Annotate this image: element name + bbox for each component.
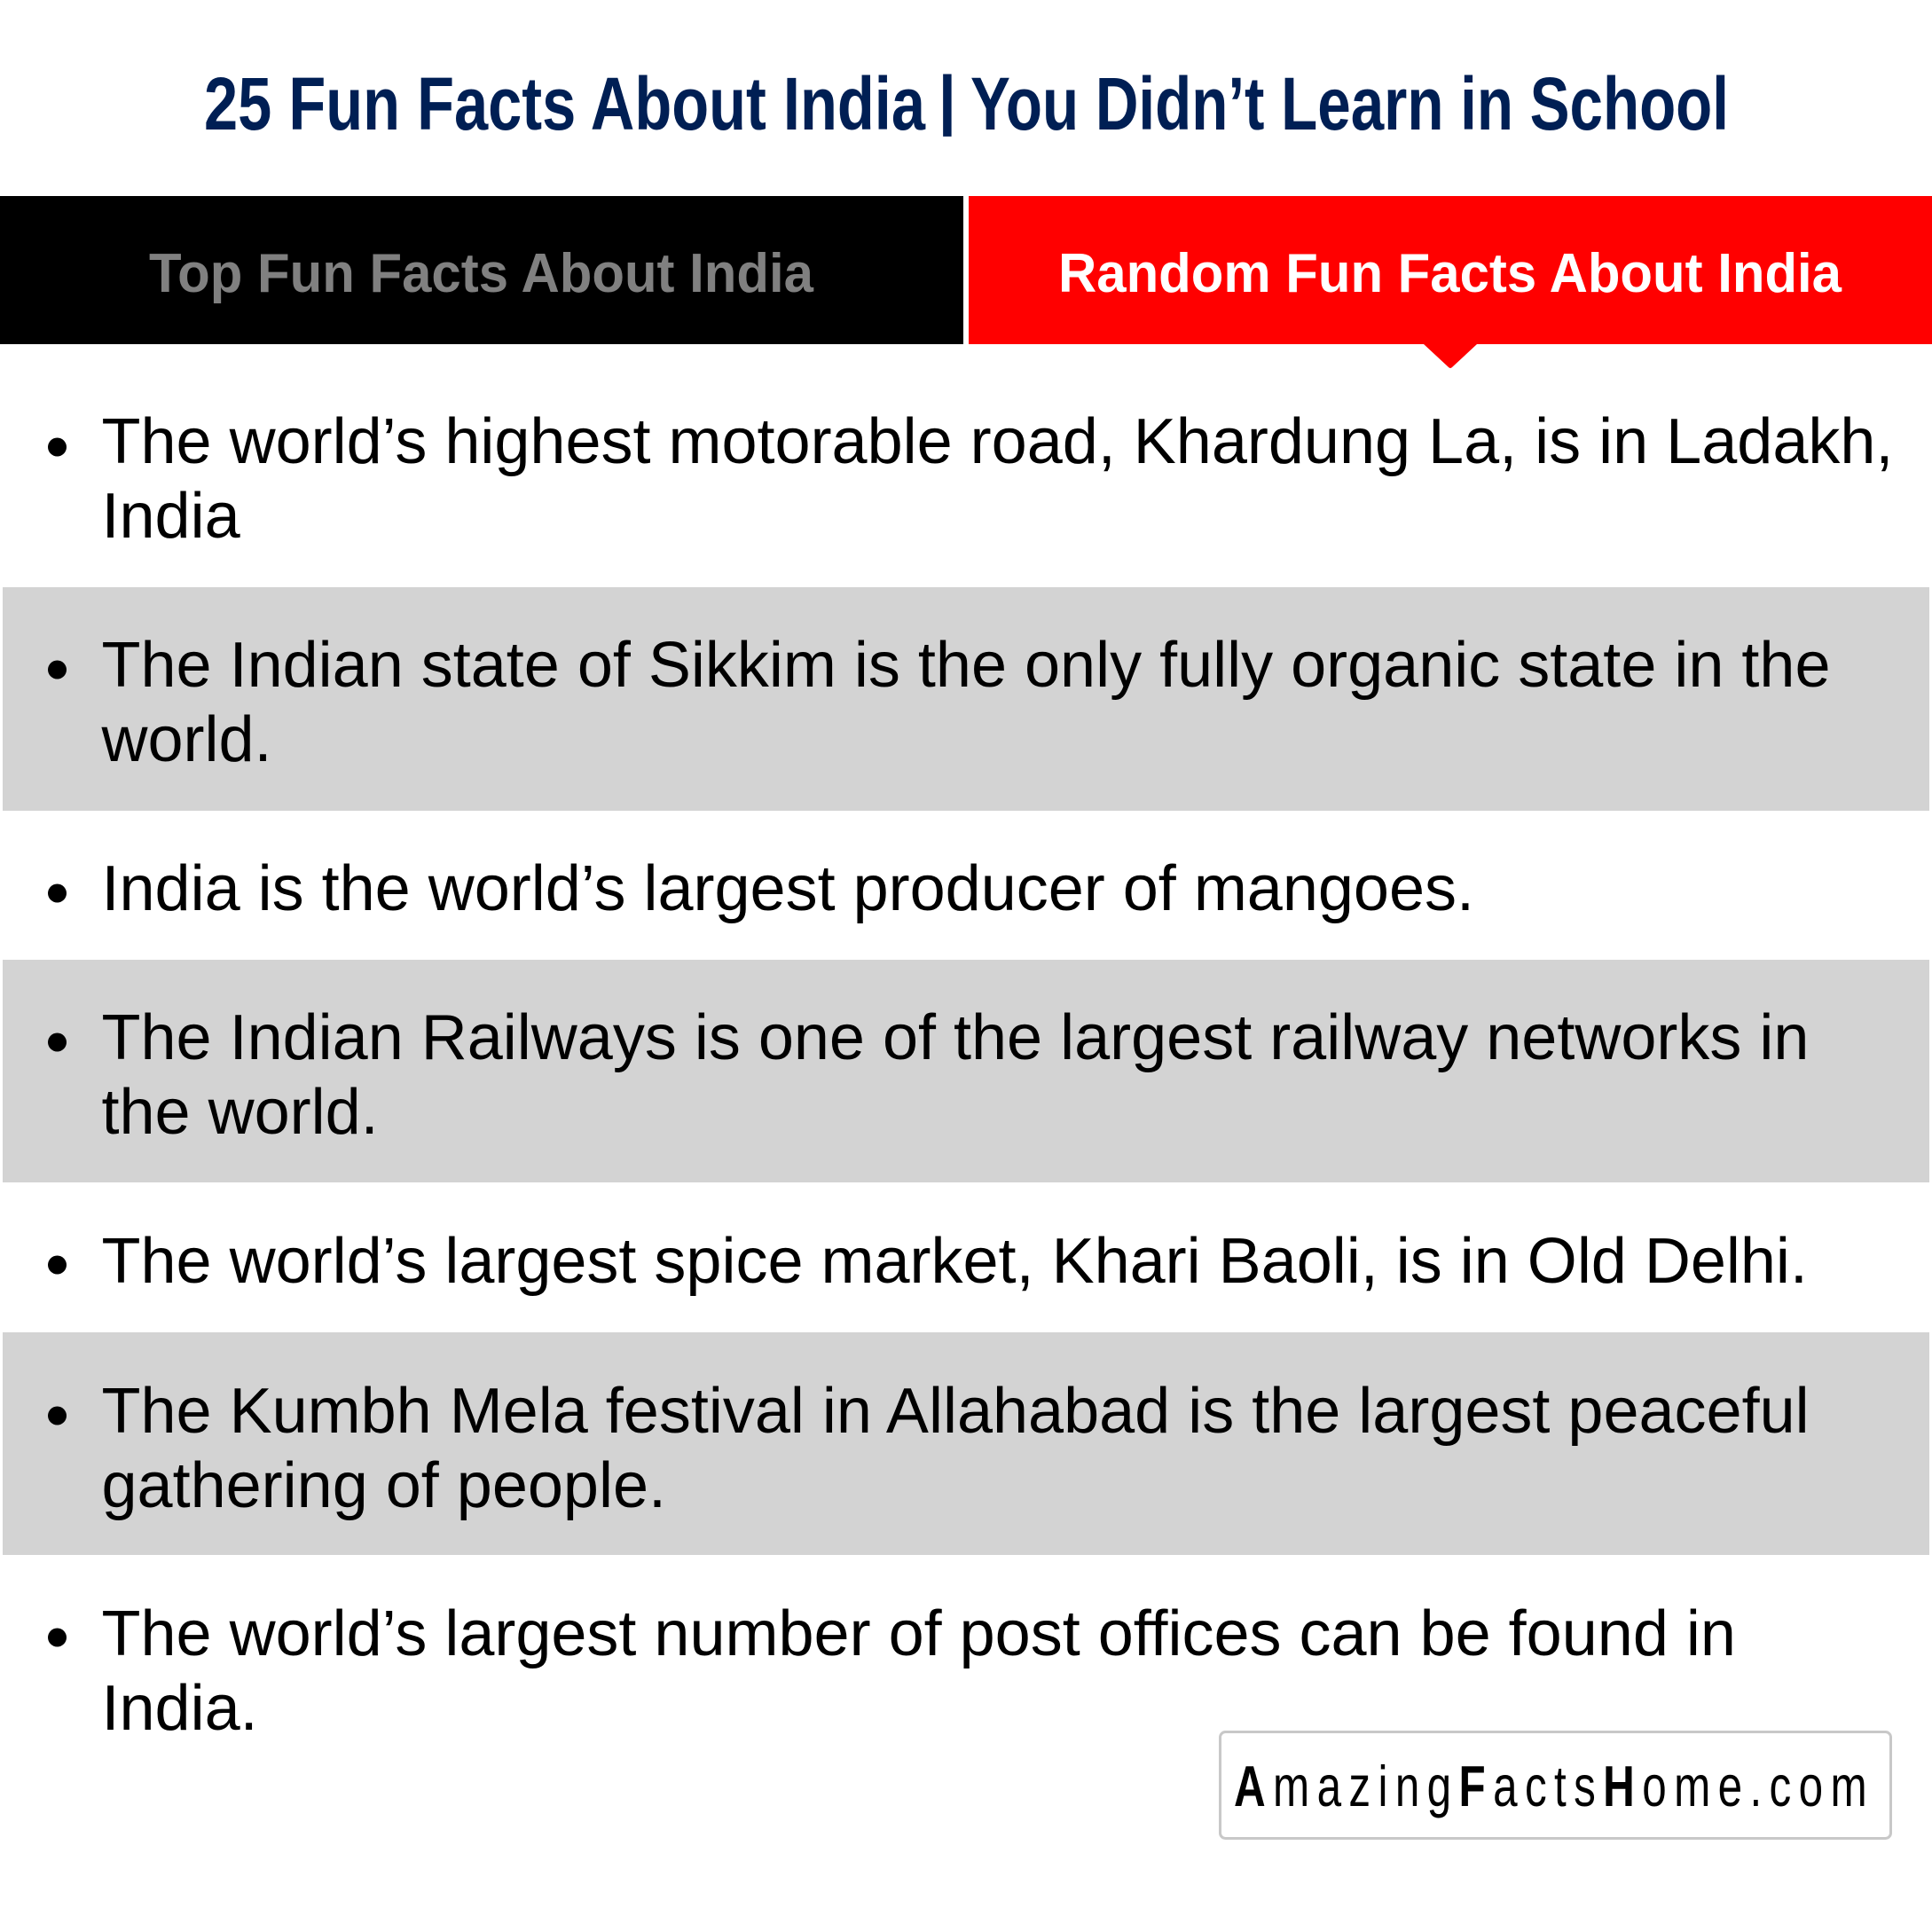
title: | (939, 62, 956, 137)
fact row 6 (3, 1332, 1929, 1555)
tab: top fun facts: Top Fun Facts About India (149, 243, 813, 304)
title: 25 Fun Facts About India (204, 62, 926, 145)
fact row 1: The world’s highest motorable road, Khardung La, is in Ladakh, (101, 406, 1893, 477)
fact row 4: the world. (101, 1077, 379, 1148)
fact row 7: The world’s largest number of post offices can be found in (101, 1598, 1736, 1669)
fact row 2: world. (101, 704, 272, 775)
fact row 7: India. (101, 1673, 258, 1744)
fact row 4: The Indian Railways is one of the largest railway networks in (101, 1002, 1809, 1073)
watermark badge: AmazingFactsHome.com (1234, 1755, 1867, 1819)
tab: random fun facts (active) (969, 196, 1932, 368)
fact row 3: India is the world’s largest producer of mangoes. (101, 853, 1474, 924)
fact row 5: The world’s largest spice market, Khari Baoli, is in Old Delhi. (101, 1226, 1808, 1297)
title (204, 62, 1729, 145)
fact row 4 (3, 960, 1929, 1182)
fact row 1 (48, 406, 1893, 552)
watermark badge (1221, 1731, 1891, 1838)
fact row 7 (48, 1598, 1736, 1744)
fact row 1: India (101, 481, 241, 552)
fact row 2 (3, 587, 1929, 811)
fact row 2: The Indian state of Sikkim is the only fully organic state in the (101, 630, 1831, 701)
tab: random fun facts (active): Random Fun Facts About India (1058, 243, 1842, 304)
fact row 6: gathering of people. (101, 1450, 666, 1521)
tab: top fun facts (0, 196, 963, 344)
fact row 6: The Kumbh Mela festival in Allahabad is the largest peaceful (101, 1376, 1810, 1447)
title: You Didn’t Learn in School (970, 62, 1729, 145)
